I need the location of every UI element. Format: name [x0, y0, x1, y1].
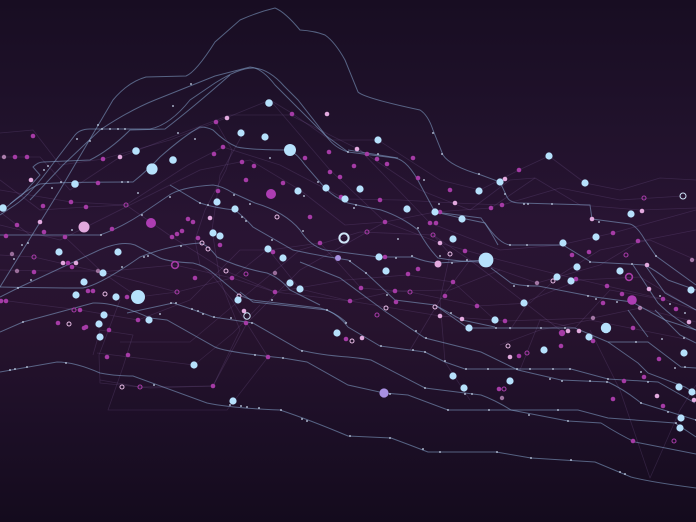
ring nodes pale [67, 215, 555, 389]
white ring nodes [244, 193, 686, 319]
lilac nodes [335, 255, 389, 398]
magenta nodes [0, 112, 678, 443]
faint background lines [0, 100, 696, 478]
light blue nodes [0, 99, 696, 432]
pink nodes [2, 112, 696, 402]
large magenta nodes [146, 189, 637, 305]
small line nodes [9, 83, 696, 475]
ring nodes magenta [32, 196, 676, 443]
